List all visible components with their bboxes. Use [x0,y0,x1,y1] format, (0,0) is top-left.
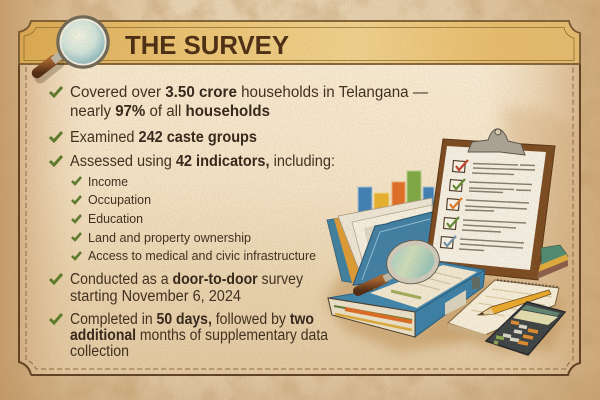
heading: THE SURVEY [125,30,289,60]
checklist rows [459,164,535,250]
bullet 4: Conducted as a door-to-door survey [70,271,303,288]
sub-list: indicators: Land and property ownership [88,230,251,245]
bullet 3: Assessed using 42 indicators, including: [70,153,335,170]
calculator [486,302,565,355]
clip [468,129,525,155]
illustration: survey materials [325,129,568,355]
bullet 5: collection [70,343,129,360]
sub-list: indicators: Income [88,174,128,189]
bullet 5: Completed in 50 days, followed by two [70,311,314,328]
bullet 2: Examined 242 caste groups [70,129,257,146]
sub-list: indicators: Education [88,211,143,226]
clipboard [425,129,555,280]
magnifying glass on binder [358,235,443,291]
bullet 5: additional months of supplementary data [70,327,328,344]
checkboxes [440,160,465,249]
folder with pages [327,198,434,285]
bullet 1: nearly 97% of all households [70,103,270,120]
notepad [448,280,559,341]
title band [19,21,580,64]
bar chart [358,171,434,217]
ground stain [325,240,560,352]
bullet 1 [50,84,428,120]
bullet 5 [50,311,328,360]
bullet 4: starting November 6, 2024 [70,288,241,305]
list: survey facts [50,84,428,360]
bullet 1: Covered over 3.50 crore households in Telangana — [70,84,428,101]
icon: magnifying glass header [37,17,108,78]
sub-list: indicators: Access to medical and civic infrastructure [88,248,316,263]
binder [328,262,485,337]
sub-list: indicators [72,174,316,263]
bullet 4 [50,271,303,305]
pencil [478,290,551,315]
stack of books [537,245,568,279]
sub-list: indicators: Occupation [88,192,151,207]
